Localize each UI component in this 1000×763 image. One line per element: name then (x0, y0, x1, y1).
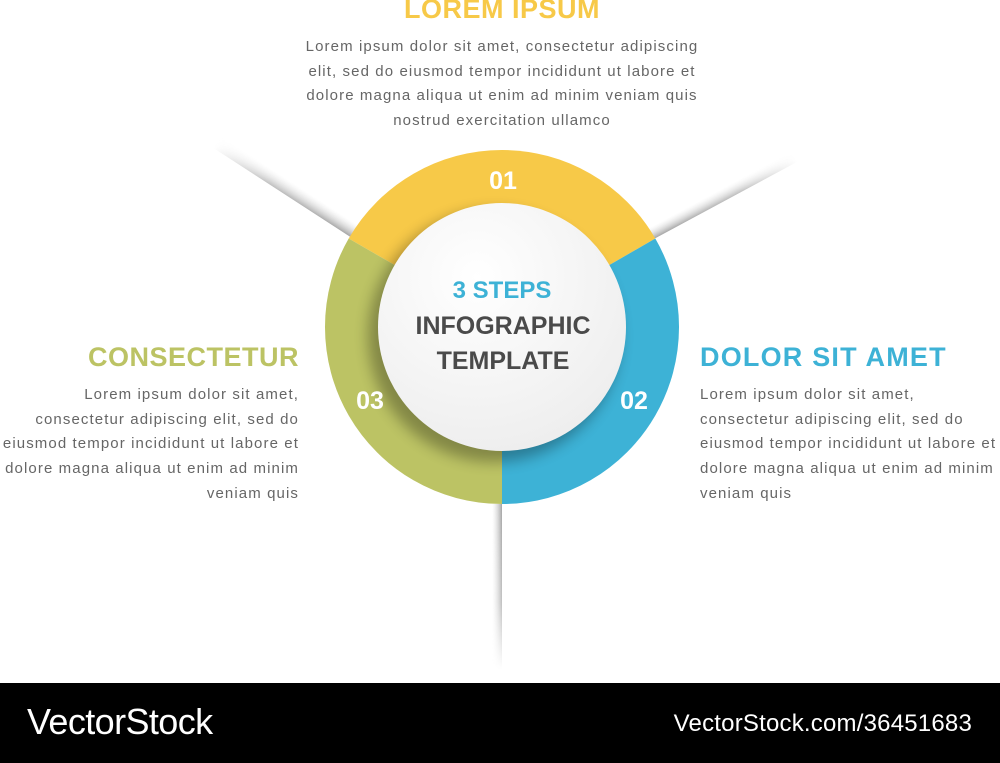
text: left: Lorem ipsum dolor sit amet, (84, 386, 299, 403)
segment 03 (325, 238, 502, 504)
text: right: veniam quis (700, 485, 792, 502)
text: left (3, 386, 299, 502)
ring: 01 (489, 167, 517, 195)
footer url: VectorStock.com/36451683 (674, 710, 972, 737)
segment 02 (502, 238, 679, 504)
text: top (306, 38, 698, 129)
center text: INFOGRAPHIC (416, 312, 590, 340)
text: top: dolore magna aliqua ut enim ad minim veniam quis (306, 87, 698, 104)
ring: 03 (356, 387, 384, 415)
text: right: eiusmod tempor incididunt ut labore et (700, 435, 996, 452)
ring (325, 150, 679, 504)
text: top: elit, sed do eiusmod tempor incididunt ut labore et (308, 63, 696, 80)
text: left: veniam quis (207, 485, 299, 502)
text: left: consectetur adipiscing elit, sed do (35, 411, 299, 428)
center text: TEMPLATE (437, 347, 569, 375)
shadow arms (214, 136, 797, 669)
text: right: Lorem ipsum dolor sit amet, (700, 386, 915, 403)
text: left: dolore magna aliqua ut enim ad minim (5, 460, 299, 477)
text: top: Lorem ipsum dolor sit amet, consectetur adipiscing (306, 38, 698, 55)
diagram (222, 150, 788, 660)
ring: 02 (620, 387, 648, 415)
heading: dolor sit amet: DOLOR SIT AMET (700, 342, 947, 372)
text: top: nostrud exercitation ullamco (393, 112, 611, 129)
text: left: eiusmod tempor incididunt ut labore et (3, 435, 299, 452)
footer (0, 683, 1000, 763)
center text (416, 277, 590, 375)
segment 01 (349, 150, 655, 327)
text: right: dolore magna aliqua ut enim ad minim (700, 460, 994, 477)
text: right (700, 386, 996, 502)
heading: consectetur: CONSECTETUR (88, 342, 299, 372)
footer brand: VectorStock (27, 701, 212, 742)
text: right: consectetur adipiscing elit, sed do (700, 411, 964, 428)
center text: 3 STEPS (453, 277, 551, 304)
